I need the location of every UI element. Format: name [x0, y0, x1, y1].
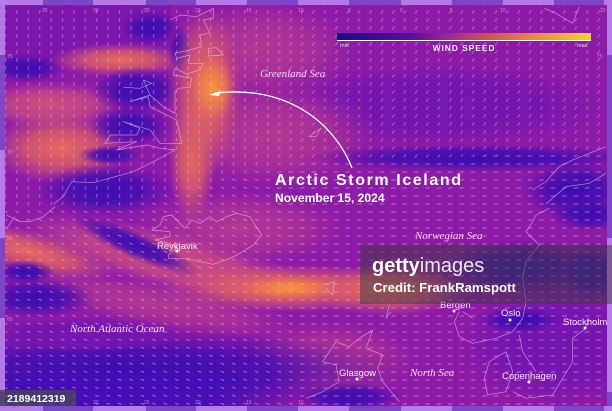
city: Oslo: Oslo: [501, 308, 521, 319]
graticule labels: 35: [42, 8, 48, 14]
graticule labels: 65: [7, 236, 13, 242]
graticule labels: 5: [450, 8, 453, 14]
graticule labels: 10: [500, 8, 506, 14]
watermark credit: Credit: FrankRamspott: [373, 280, 516, 295]
graticule labels: 30: [93, 8, 99, 14]
graticule labels: 5: [348, 8, 351, 14]
city: Stockholm: Stockholm: [563, 317, 607, 328]
watermark band: [360, 245, 612, 304]
sea label: Norwegian Sea: Norwegian Sea: [414, 230, 483, 242]
coast: Iceland: [7, 207, 262, 264]
city: Reykjavik: Reykjavik: [157, 241, 198, 252]
sea label: Greenland Sea: Greenland Sea: [260, 68, 326, 80]
image id badge: 2189412319: [7, 393, 66, 405]
coast: northern Norway: [309, 7, 606, 204]
sea label: North Atlantic Ocean: North Atlantic Ocean: [69, 323, 165, 335]
city: Bergen: Bergen: [440, 300, 471, 311]
graticule labels: 15: [246, 8, 252, 14]
sea label: North Sea: North Sea: [409, 367, 455, 379]
coast: Scandinavia, Britain and Denmark: [306, 208, 589, 402]
graticule labels: 20: [195, 8, 201, 14]
graticule labels: 10: [298, 400, 304, 406]
watermark logo: gettyimages: [372, 255, 484, 277]
graticule labels: 10: [298, 8, 304, 14]
graticule labels: 35: [144, 8, 150, 14]
title: Arctic Storm Iceland: [275, 172, 463, 189]
graticule labels: 30: [93, 400, 99, 406]
city: Glasgow: Glasgow: [339, 368, 376, 379]
graticule labels: 20: [600, 8, 606, 14]
wind speed legend: WIND SPEED: [433, 43, 495, 53]
graticule labels: 70: [7, 150, 13, 156]
graticule labels: 15: [246, 400, 252, 406]
coast: Greenland: [53, 8, 223, 204]
image id badge: [0, 390, 76, 406]
graticule labels: 75: [597, 54, 603, 60]
graticule labels: 0: [400, 8, 403, 14]
graticule labels: 60: [7, 317, 13, 323]
graticule labels: 25: [144, 400, 150, 406]
wind speed legend: min: [340, 43, 349, 49]
city: Copenhagen: Copenhagen: [502, 371, 556, 382]
arrow: from title to storm centre: [209, 90, 352, 168]
wind speed legend: [337, 33, 591, 53]
graticule labels: 20: [195, 400, 201, 406]
wind speed legend: max: [577, 43, 588, 49]
graticule labels: 75: [7, 54, 13, 60]
date: November 15, 2024: [275, 191, 385, 205]
